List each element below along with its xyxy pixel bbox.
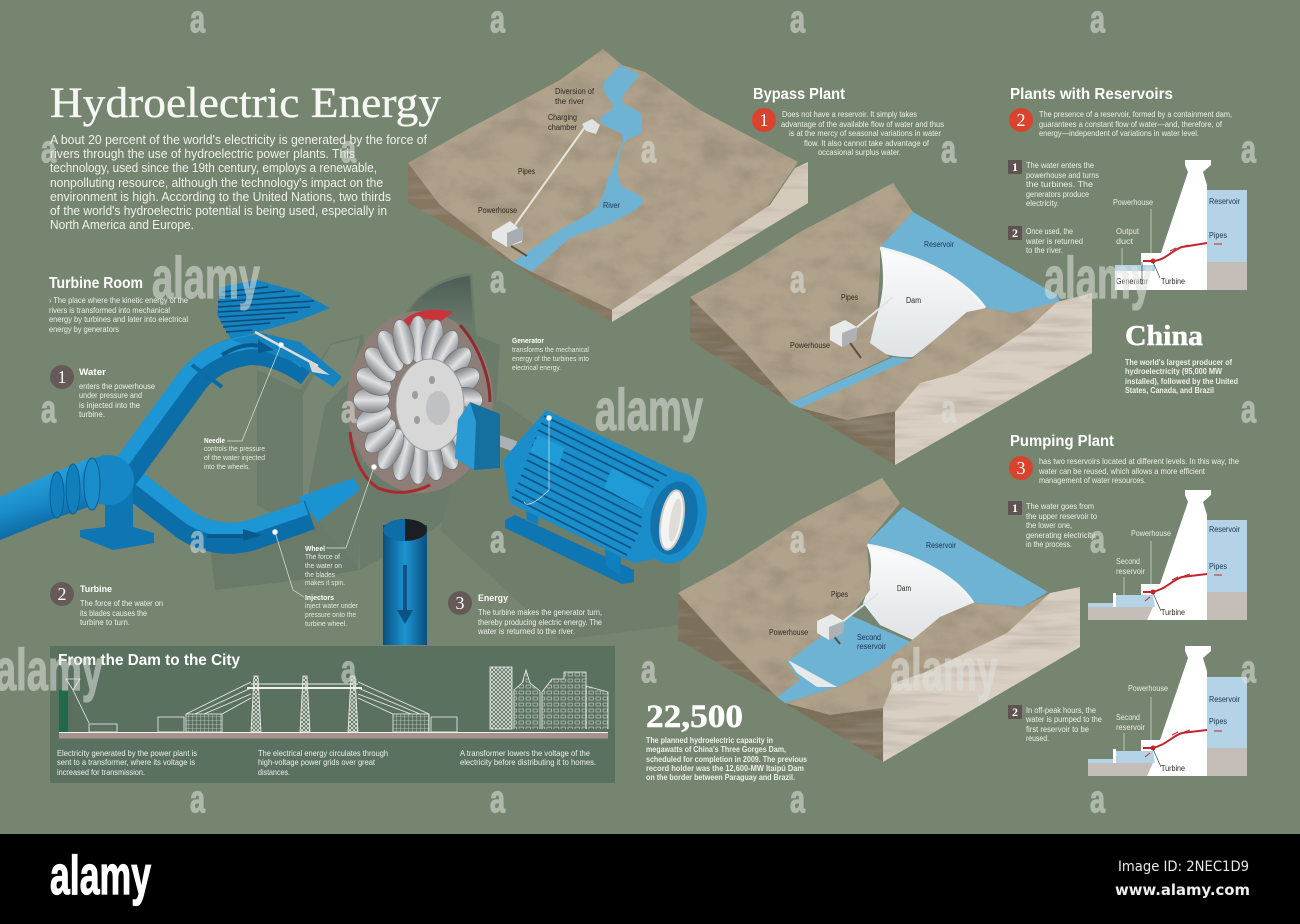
section: pumping description: water can be reused, which allows a more efficient — [1038, 466, 1206, 476]
labels: River — [603, 201, 620, 210]
callout: China: The world's largest producer of — [1125, 357, 1232, 367]
step list: reservoirs: the turbines. The — [1026, 179, 1093, 189]
step: water: 1 — [58, 367, 66, 387]
watermark: alamy: a — [1241, 389, 1257, 431]
watermark: alamy: a — [190, 779, 206, 821]
step list: reservoirs: water is returned — [1025, 236, 1083, 246]
step: energy — [448, 591, 602, 636]
step list: reservoirs — [1008, 160, 1099, 255]
charging chamber — [582, 119, 600, 134]
section: pumping description: 3 — [1016, 458, 1026, 478]
captions: increased for transmission. — [57, 767, 145, 777]
step: turbine — [50, 582, 163, 627]
step list: reservoirs: Once used, the — [1026, 226, 1073, 236]
captions: sent to a transformer, where its voltage is — [57, 757, 195, 767]
dam — [870, 248, 985, 357]
reservoir water — [880, 212, 1060, 320]
watermark: alamy: a — [41, 389, 57, 431]
labels: reservoir — [857, 642, 886, 651]
heading: pumping plant: Pumping Plant — [1010, 433, 1114, 450]
watermark: alamy: alamy — [152, 246, 260, 311]
room walls and shadows — [210, 273, 680, 640]
terrain right top — [785, 593, 1050, 715]
text block: turbine room intro — [49, 295, 188, 334]
section: reservoirs description — [1009, 108, 1232, 138]
label: needle: into the wheels. — [204, 462, 250, 471]
labels: the river — [555, 97, 584, 106]
terrain left face — [408, 163, 612, 322]
labels: Reservoir — [924, 240, 954, 249]
icon: turbine housing with fins — [217, 280, 330, 341]
icon: main pipe, flange and support — [0, 455, 154, 550]
watermark: alamy: a — [641, 649, 657, 691]
label: wheel: the blades — [305, 570, 335, 579]
heading: From the Dam to the City — [58, 652, 240, 669]
step list: pumping 1: in the process. — [1026, 539, 1072, 549]
captions: Electricity generated by the power plant is — [57, 748, 197, 758]
terrain left top — [690, 183, 913, 403]
captions: high-voltage power grids over great — [258, 757, 376, 767]
river — [513, 65, 643, 272]
reservoir water — [867, 507, 1048, 607]
transmission towers and cables — [66, 676, 457, 732]
diagram: pumping plant generating: Reservoir — [1209, 525, 1240, 534]
labels: Powerhouse — [790, 341, 830, 350]
diagram: pumping plant generating: reservoir — [1116, 567, 1145, 576]
step list: pumping 1: 1 — [1012, 501, 1018, 515]
powerhouse and pipes — [830, 297, 893, 358]
label: generator: transforms the mechanical — [512, 345, 589, 354]
step list: pumping 1 — [1008, 501, 1097, 549]
callout: 22,500: The planned hydroelectric capacity in — [646, 735, 773, 745]
step list: pumping 1: generating electricity — [1026, 530, 1096, 540]
label: injectors — [305, 593, 358, 628]
step list: pumping 2: first reservoir to be — [1026, 724, 1089, 734]
terrain right top — [800, 302, 1057, 420]
text block: introduction: North America and Europe. — [50, 218, 194, 232]
step: energy: The turbine makes the generator turn, — [478, 607, 602, 617]
section: pumping description — [1009, 456, 1239, 485]
section: pumping description: has two reservoirs located at different levels. In this way, the — [1039, 456, 1239, 466]
dam — [863, 545, 973, 640]
diagram: pumping plant generating: Turbine — [1161, 608, 1185, 617]
icon: drain pipe with down arrow — [383, 519, 427, 645]
section: reservoirs description: 2 — [1016, 110, 1026, 130]
captions — [57, 748, 596, 777]
label: wheel: the water on — [305, 561, 342, 570]
text block: introduction — [50, 133, 427, 232]
panel: from the dam to the city — [50, 646, 615, 783]
callout: China — [1125, 321, 1238, 395]
step list: pumping 2: water is pumped to the — [1025, 714, 1102, 724]
labels: Second — [857, 633, 881, 642]
step list: reservoirs: 1 — [1012, 160, 1018, 174]
step list: reservoirs: to the river. — [1026, 245, 1063, 255]
watermark: alamy: a — [190, 0, 206, 41]
step: water — [50, 365, 155, 419]
diagram: pumping plant off-peak: Pipes — [1209, 717, 1227, 726]
icon: upper feed pipe — [106, 332, 342, 492]
captions: distances. — [258, 767, 290, 777]
heading: plants with reservoirs: Plants with Reservoirs — [1010, 86, 1173, 103]
section: bypass plant description: Does not have a reservoir. It simply takes — [782, 109, 917, 119]
diagram: pumping plant off-peak: Powerhouse — [1128, 684, 1168, 693]
step list: pumping 1: The water goes from — [1026, 501, 1094, 511]
text block: introduction: of the world's hydroelectric potential is being used, especially in — [50, 204, 387, 218]
label: generator: energy of the turbines into — [512, 354, 589, 363]
panel: pumping plant terrain — [678, 478, 1080, 762]
text block: turbine room intro: energy by generators — [49, 324, 119, 334]
watermark: alamy: a — [1090, 0, 1106, 41]
section: bypass plant description: 1 — [760, 110, 768, 130]
captions: The electrical energy circulates through — [258, 748, 388, 758]
step list: pumping 2: reused. — [1026, 733, 1049, 743]
callout: 22,500: 22,500 — [646, 699, 743, 735]
diagram: reservoir plant section: Powerhouse — [1113, 198, 1153, 207]
label: wheel — [305, 544, 345, 587]
watermark: alamy: a — [341, 649, 357, 691]
step: energy: water is returned to the river. — [477, 626, 575, 636]
step list: reservoirs: electricity. — [1026, 198, 1059, 208]
label: generator: electrical energy. — [512, 363, 561, 372]
label: needle: of the water injected — [204, 453, 265, 462]
watermark: alamy: a — [1241, 649, 1257, 691]
footer bar — [0, 834, 1300, 924]
terrain left top — [678, 478, 900, 697]
footer logo: alamy — [50, 844, 151, 906]
icon: coupling and shaft — [455, 402, 517, 470]
section: reservoirs description: The presence of a reservoir, formed by a containment dam, — [1039, 109, 1232, 119]
step list: pumping 2 — [1008, 705, 1102, 743]
step: water: turbine. — [79, 409, 105, 419]
captions: A transformer lowers the voltage of the — [460, 748, 590, 758]
callout: 22,500 — [646, 699, 807, 782]
labels: Pipes — [518, 167, 535, 176]
terrain left face — [690, 297, 790, 403]
labels: Charging — [548, 113, 577, 122]
step: energy: Energy — [478, 593, 508, 603]
panel: bypass plant terrain — [408, 49, 808, 322]
callout: 22,500: scheduled for completion in 2009. The previous — [646, 754, 807, 764]
panel: reservoir plant terrain — [690, 183, 1092, 465]
label: needle — [204, 436, 265, 471]
pipes — [515, 127, 585, 225]
diagram: pumping plant off-peak — [1088, 646, 1247, 776]
step list: reservoirs: powerhouse and turns — [1026, 170, 1099, 180]
step list: pumping 1: the lower one, — [1026, 520, 1072, 530]
watermark: alamy: a — [641, 129, 657, 171]
diagram: reservoir plant section: Pipes — [1209, 231, 1227, 240]
watermark: alamy: a — [341, 129, 357, 171]
section: reservoirs description: guarantees a constant flow of water—and, therefore, of — [1039, 119, 1223, 129]
watermark: alamy: a — [490, 779, 506, 821]
label: wheel: makes it spin. — [305, 578, 345, 587]
river — [790, 357, 913, 408]
section: bypass plant description: occasional surplus water. — [818, 147, 901, 157]
label: needle: controls the pressure — [204, 444, 265, 453]
heading: bypass plant: Bypass Plant — [753, 86, 845, 103]
label: injectors: Injectors — [305, 593, 334, 602]
labels: Dam — [897, 584, 911, 593]
labels: Powerhouse — [478, 206, 517, 215]
labels: Pipes — [841, 293, 858, 302]
watermark: alamy: a — [490, 259, 506, 301]
watermark: alamy: a — [490, 519, 506, 561]
labels: Reservoir — [926, 541, 956, 550]
watermark: alamy: a — [941, 389, 957, 431]
section: bypass plant description: advantage of the available flow of water and thus — [781, 119, 944, 129]
diagram: pumping plant off-peak: Second — [1116, 713, 1140, 722]
callout: 22,500: record holder was the 12,600-MW Itaipú Dam — [646, 763, 804, 773]
callout: China: States, Canada, and Brazil — [1125, 385, 1214, 395]
city skyline — [490, 667, 608, 729]
step: turbine: 2 — [58, 584, 66, 604]
label: generator: Generator — [512, 336, 544, 345]
icon: lower pipe with arrow — [112, 462, 360, 541]
label: needle: Needle — [204, 436, 225, 445]
step: water: under pressure and — [79, 390, 142, 400]
label: generator — [512, 336, 589, 372]
terrain right face — [883, 587, 1080, 762]
watermark: alamy: a — [790, 0, 806, 41]
text block: introduction: environment is high. According to the United Nations, two thirds — [50, 190, 391, 204]
callout: China: hydroelectricity (95,000 MW — [1125, 366, 1223, 376]
watermark: alamy: a — [490, 0, 506, 41]
labels: Powerhouse — [769, 628, 808, 637]
diagram: pumping plant generating: Powerhouse — [1131, 529, 1171, 538]
watermark: alamy: a — [790, 779, 806, 821]
step list: pumping 2: 2 — [1012, 705, 1018, 719]
label: injectors: inject water under — [305, 601, 358, 610]
diagram: reservoir plant section: Reservoir — [1209, 197, 1240, 206]
text block: introduction: A bout 20 percent of the world's electricity is generated by the force of — [50, 133, 427, 147]
step: water: enters the powerhouse — [79, 381, 155, 391]
terrain front face — [800, 408, 895, 465]
terrain right face — [895, 293, 1092, 465]
watermark: alamy: alamy — [1044, 246, 1152, 311]
powerhouse and pipes — [817, 593, 879, 644]
text block: introduction: rivers through the use of hydroelectric power plants. This — [50, 147, 355, 161]
text block: turbine room intro: rivers is transformed into mechanical — [49, 305, 170, 315]
watermark: alamy: alamy — [890, 638, 998, 703]
label: injectors: pressure onto the — [305, 610, 356, 619]
labels: Dam — [906, 296, 921, 305]
step list: reservoirs: generators produce — [1026, 189, 1089, 199]
lower dam — [788, 660, 837, 687]
second reservoir water — [777, 615, 911, 703]
step: turbine: its blades causes the — [80, 608, 147, 618]
diagram: pumping plant generating: Pipes — [1209, 562, 1227, 571]
step list: pumping 1: the upper reservoir to — [1026, 511, 1097, 521]
step: energy: 3 — [456, 593, 464, 613]
watermark: alamy: a — [1241, 129, 1257, 171]
section: bypass plant description — [752, 108, 944, 157]
step: water: Water — [79, 367, 107, 377]
watermark: alamy: a — [790, 519, 806, 561]
watermark: alamy: a — [790, 259, 806, 301]
step list: reservoirs: The water enters the — [1026, 160, 1094, 170]
icon: generator — [503, 410, 715, 584]
callout: 22,500: megawatts of China's Three Gorges Dam, — [646, 744, 786, 754]
ground — [59, 733, 608, 738]
diagram: pumping plant off-peak: Reservoir — [1209, 695, 1240, 704]
label: injectors: turbine wheel. — [305, 619, 347, 628]
terrain right face — [612, 162, 808, 322]
labels: Pipes — [831, 590, 848, 599]
callout: China: installed), followed by the United — [1125, 376, 1238, 386]
text block: turbine room intro: energy by turbines and later into electrical — [49, 314, 188, 324]
dam crest — [880, 248, 985, 308]
text block: introduction: nonpolluting resource, although the technology's impact on the — [50, 176, 383, 190]
section: bypass plant description: is at the mercy of seasonal variations in water — [789, 128, 941, 138]
captions: electricity before distributing it to homes. — [460, 757, 596, 767]
diagram: reservoir plant section: Output — [1116, 227, 1140, 236]
diagram: reservoir plant section: Generator — [1116, 277, 1148, 286]
labels — [790, 240, 954, 350]
labels: Diversion of — [555, 87, 595, 96]
diagram: reservoir plant section — [1113, 160, 1247, 290]
panel: turbine room illustration — [0, 273, 715, 645]
heading: turbine room: Turbine Room — [49, 275, 143, 292]
text block: introduction: technology, used since the 19th century, employs a renewable, — [50, 161, 377, 175]
step: turbine: The force of the water on — [80, 598, 163, 608]
labels — [478, 87, 620, 215]
powerhouse — [492, 221, 527, 256]
step: energy: thereby producing electric energy. The — [478, 617, 602, 627]
watermark: alamy: a — [1090, 779, 1106, 821]
labels: chamber — [548, 123, 577, 132]
watermark: alamy: alamy — [595, 378, 703, 443]
terrain front face — [785, 703, 883, 762]
section: reservoirs description: energy—independent of variations in water level. — [1039, 128, 1199, 138]
labels — [769, 541, 956, 651]
icon: Pelton wheel — [347, 310, 493, 493]
label: wheel: Wheel — [305, 544, 325, 553]
section: pumping description: management of water resources. — [1039, 475, 1146, 485]
label: wheel: The force of — [305, 552, 341, 561]
callout: 22,500: on the border between Paraguay and Brazil. — [646, 772, 795, 782]
diagram: pumping plant generating: Second — [1116, 557, 1140, 566]
watermark: alamy: a — [190, 519, 206, 561]
diagram: reservoir plant section: duct — [1116, 237, 1134, 246]
diagram: pumping plant off-peak: reservoir — [1116, 723, 1145, 732]
watermark: alamy: a — [341, 389, 357, 431]
text block: turbine room intro: › The place where the kinetic energy of the — [49, 295, 188, 305]
terrain top — [408, 49, 798, 310]
step list: reservoirs: 2 — [1012, 226, 1018, 240]
watermark: alamy: a — [1090, 519, 1106, 561]
diagram: pumping plant off-peak: Turbine — [1161, 764, 1185, 773]
step: turbine: turbine to turn. — [80, 617, 130, 627]
watermark: alamy: a — [941, 129, 957, 171]
step list: pumping 2: In off-peak hours, the — [1026, 705, 1096, 715]
footer url: www.alamy.com — [1115, 881, 1250, 899]
diagram: reservoir plant section: Turbine — [1161, 277, 1185, 286]
step: turbine: Turbine — [80, 584, 112, 594]
section: bypass plant description: flow. It also cannot take advantage of — [804, 138, 930, 148]
footer image id: Image ID: 2NEC1D9 — [1118, 859, 1249, 875]
dam wall — [59, 690, 68, 732]
diagram: pumping plant generating — [1088, 490, 1247, 620]
terrain left face — [678, 593, 777, 697]
dam crest — [867, 545, 973, 603]
title: Hydroelectric Energy — [50, 80, 442, 127]
callout lines — [227, 342, 552, 597]
watermark: alamy: a — [41, 129, 57, 171]
callout: China: China — [1125, 321, 1203, 352]
step: water: is injected into the — [79, 400, 140, 410]
